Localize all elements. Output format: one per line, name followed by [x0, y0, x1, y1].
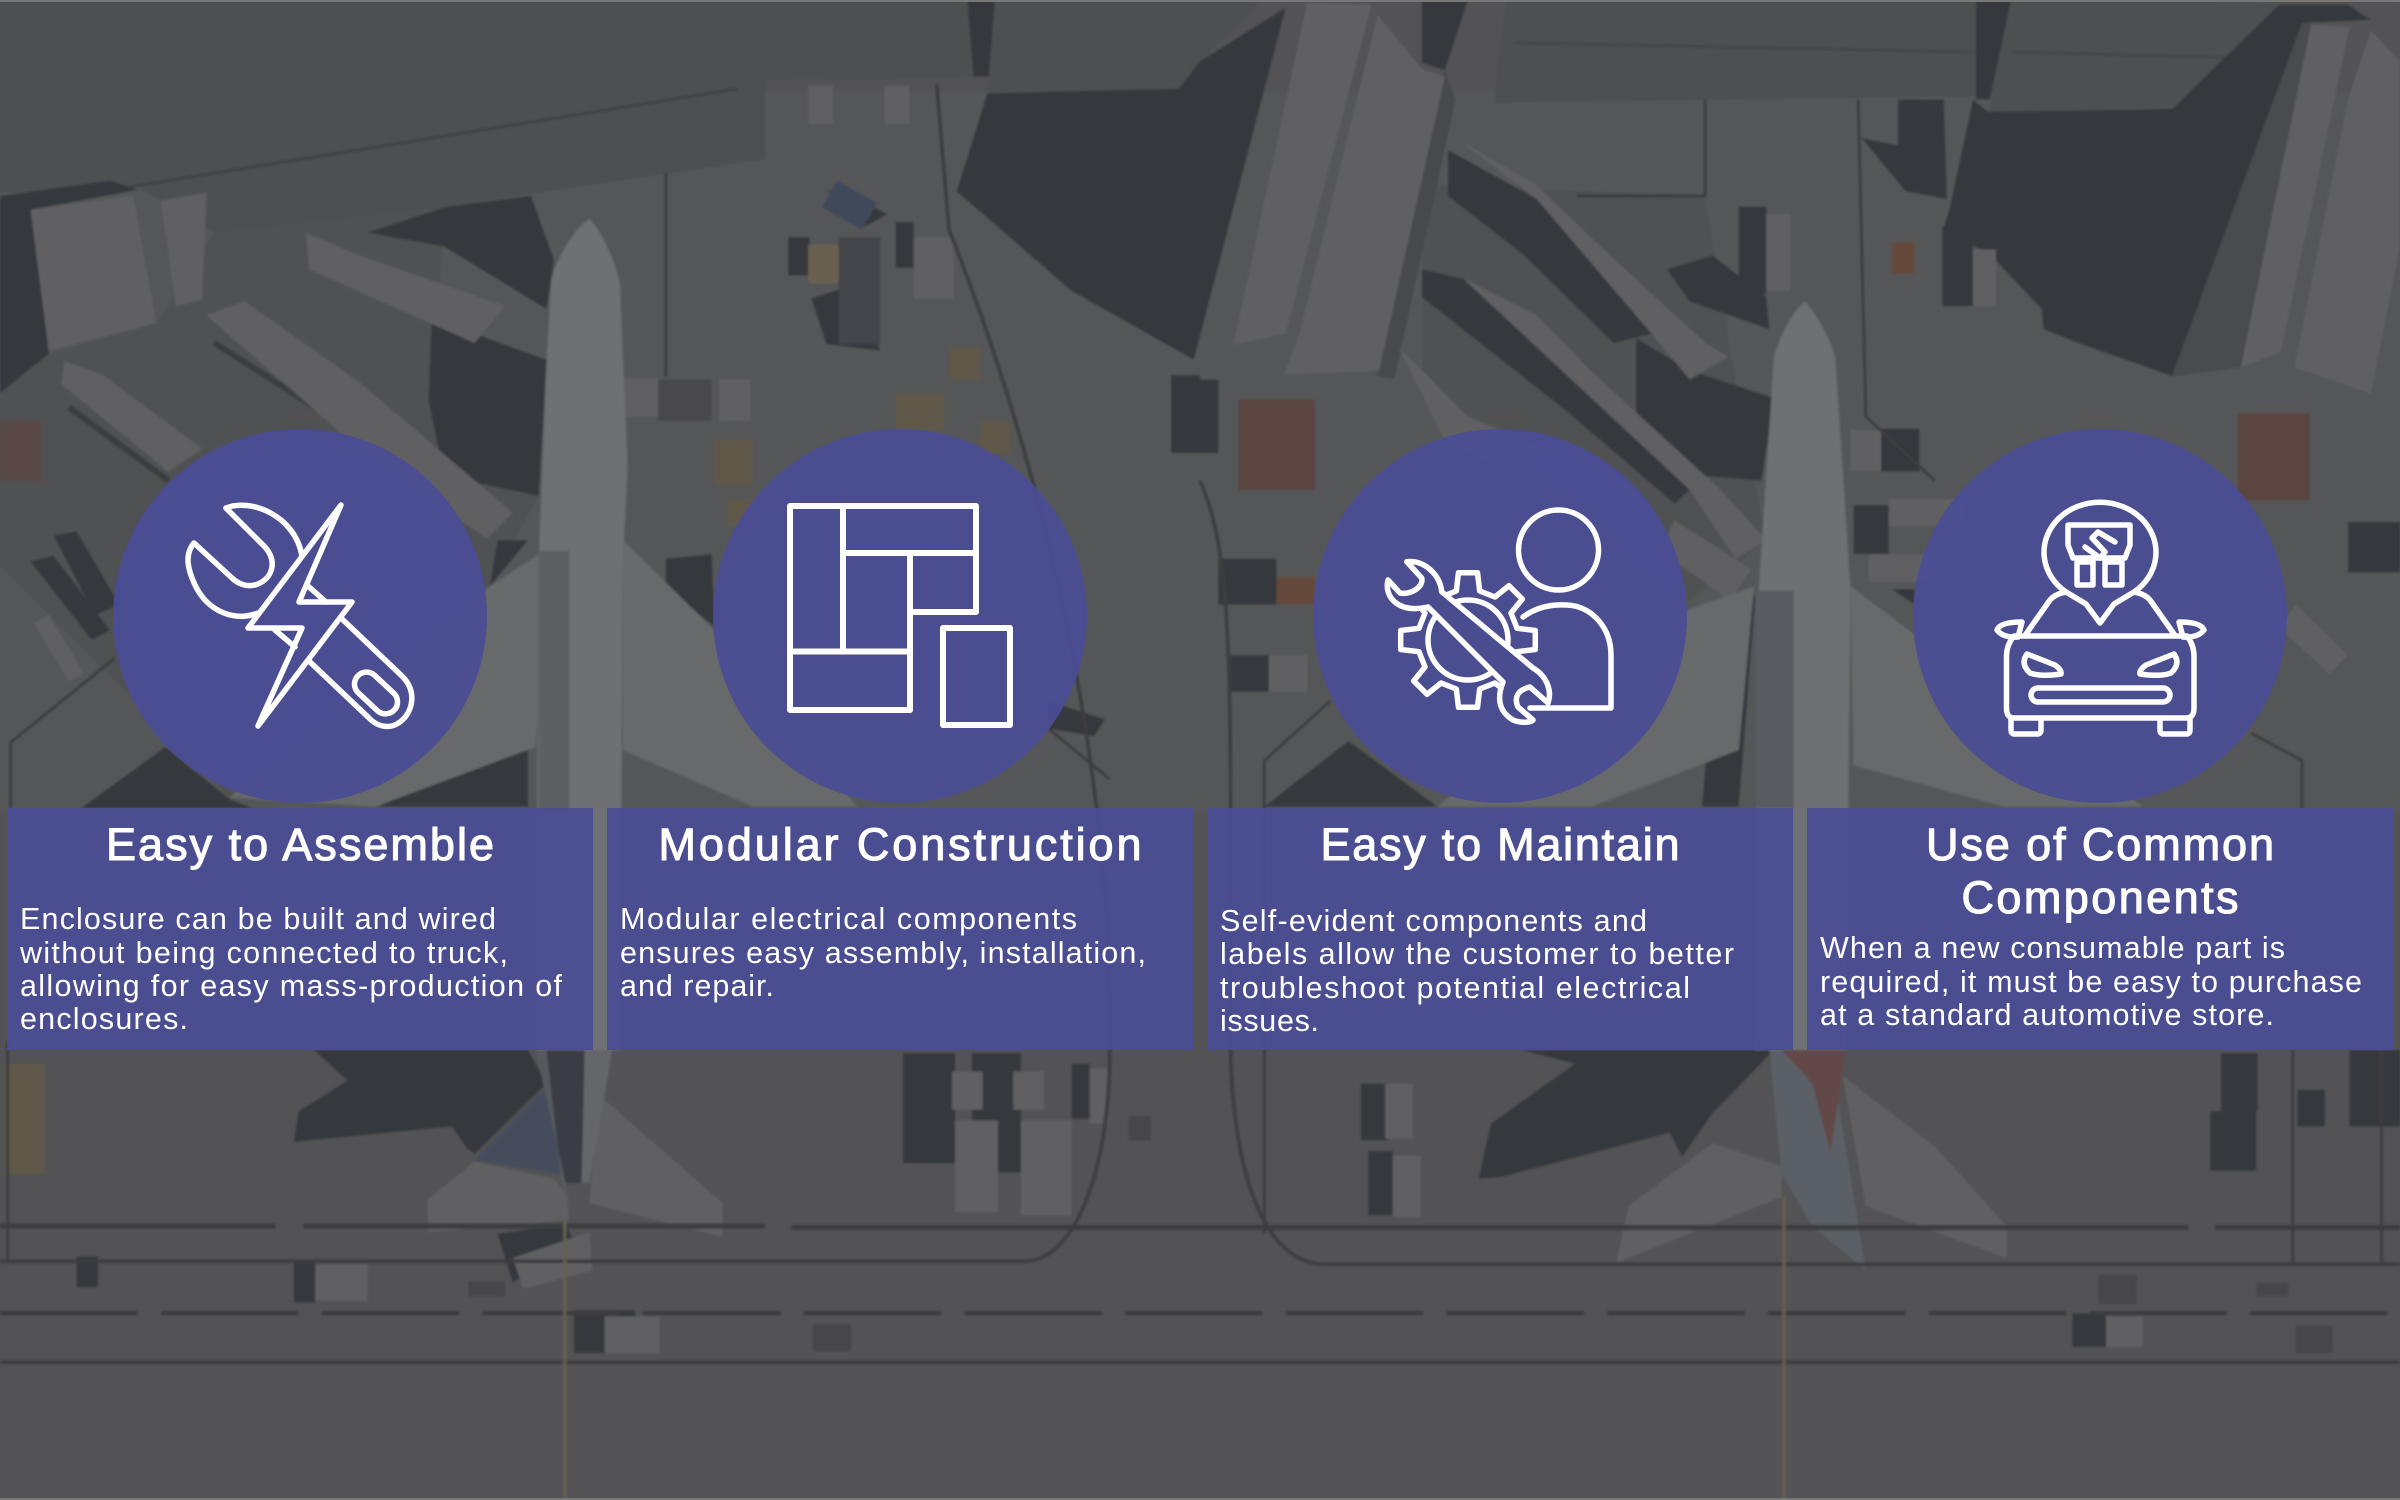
icon circle: car with fuse pin: [1913, 429, 2287, 803]
caption box: Use of Common: [1926, 819, 2274, 870]
caption box: Modular Construction: [658, 819, 1142, 870]
caption box: issues.: [1220, 1004, 1319, 1038]
caption box: [607, 808, 1193, 1050]
panel: Use of Common Components: [1807, 429, 2393, 1050]
gate area tone: [0, 207, 539, 797]
caption box: without being connected to truck,: [19, 936, 508, 970]
caption box: labels allow the customer to better: [1220, 937, 1734, 971]
light concourses, bridges, wings: [2172, 23, 2311, 377]
caption box: Self-evident components and: [1220, 904, 1647, 938]
caption box: at a standard automotive store.: [1820, 998, 2274, 1032]
tail details: [474, 1087, 562, 1174]
caption box: [1207, 808, 1793, 1050]
caption box: Components: [1962, 872, 2238, 923]
icon circle: person with gear and wrench: [1313, 429, 1687, 803]
caption box: enclosures.: [20, 1002, 188, 1036]
caption box: Modular electrical components: [620, 902, 1077, 936]
caption box: and repair.: [620, 969, 774, 1003]
icon circle: wrench and lightning bolt: [113, 429, 487, 803]
caption box: ensures easy assembly, installation,: [620, 936, 1146, 970]
panel: Easy to Assemble: [7, 429, 593, 1050]
panel: Easy to Maintain: [1207, 429, 1793, 1050]
caption box: troubleshoot potential electrical: [1220, 971, 1690, 1005]
panel: Modular Construction: [607, 429, 1193, 1050]
caption box: Easy to Assemble: [106, 819, 494, 870]
plane fuselages: [536, 219, 1851, 1050]
caption box: [1807, 808, 2393, 1050]
coloured ground items: [1238, 399, 1315, 490]
caption box: allowing for easy mass-production of: [20, 969, 563, 1003]
caption box: When a new consumable part is: [1820, 931, 2285, 965]
caption box: required, it must be easy to purchase: [1820, 965, 2362, 999]
caption box: [7, 808, 593, 1050]
icon circle: modular blocks: [713, 429, 1087, 803]
caption box: Easy to Maintain: [1320, 819, 1680, 870]
caption box: Enclosure can be built and wired: [20, 902, 496, 936]
roofs: [0, 0, 2279, 233]
